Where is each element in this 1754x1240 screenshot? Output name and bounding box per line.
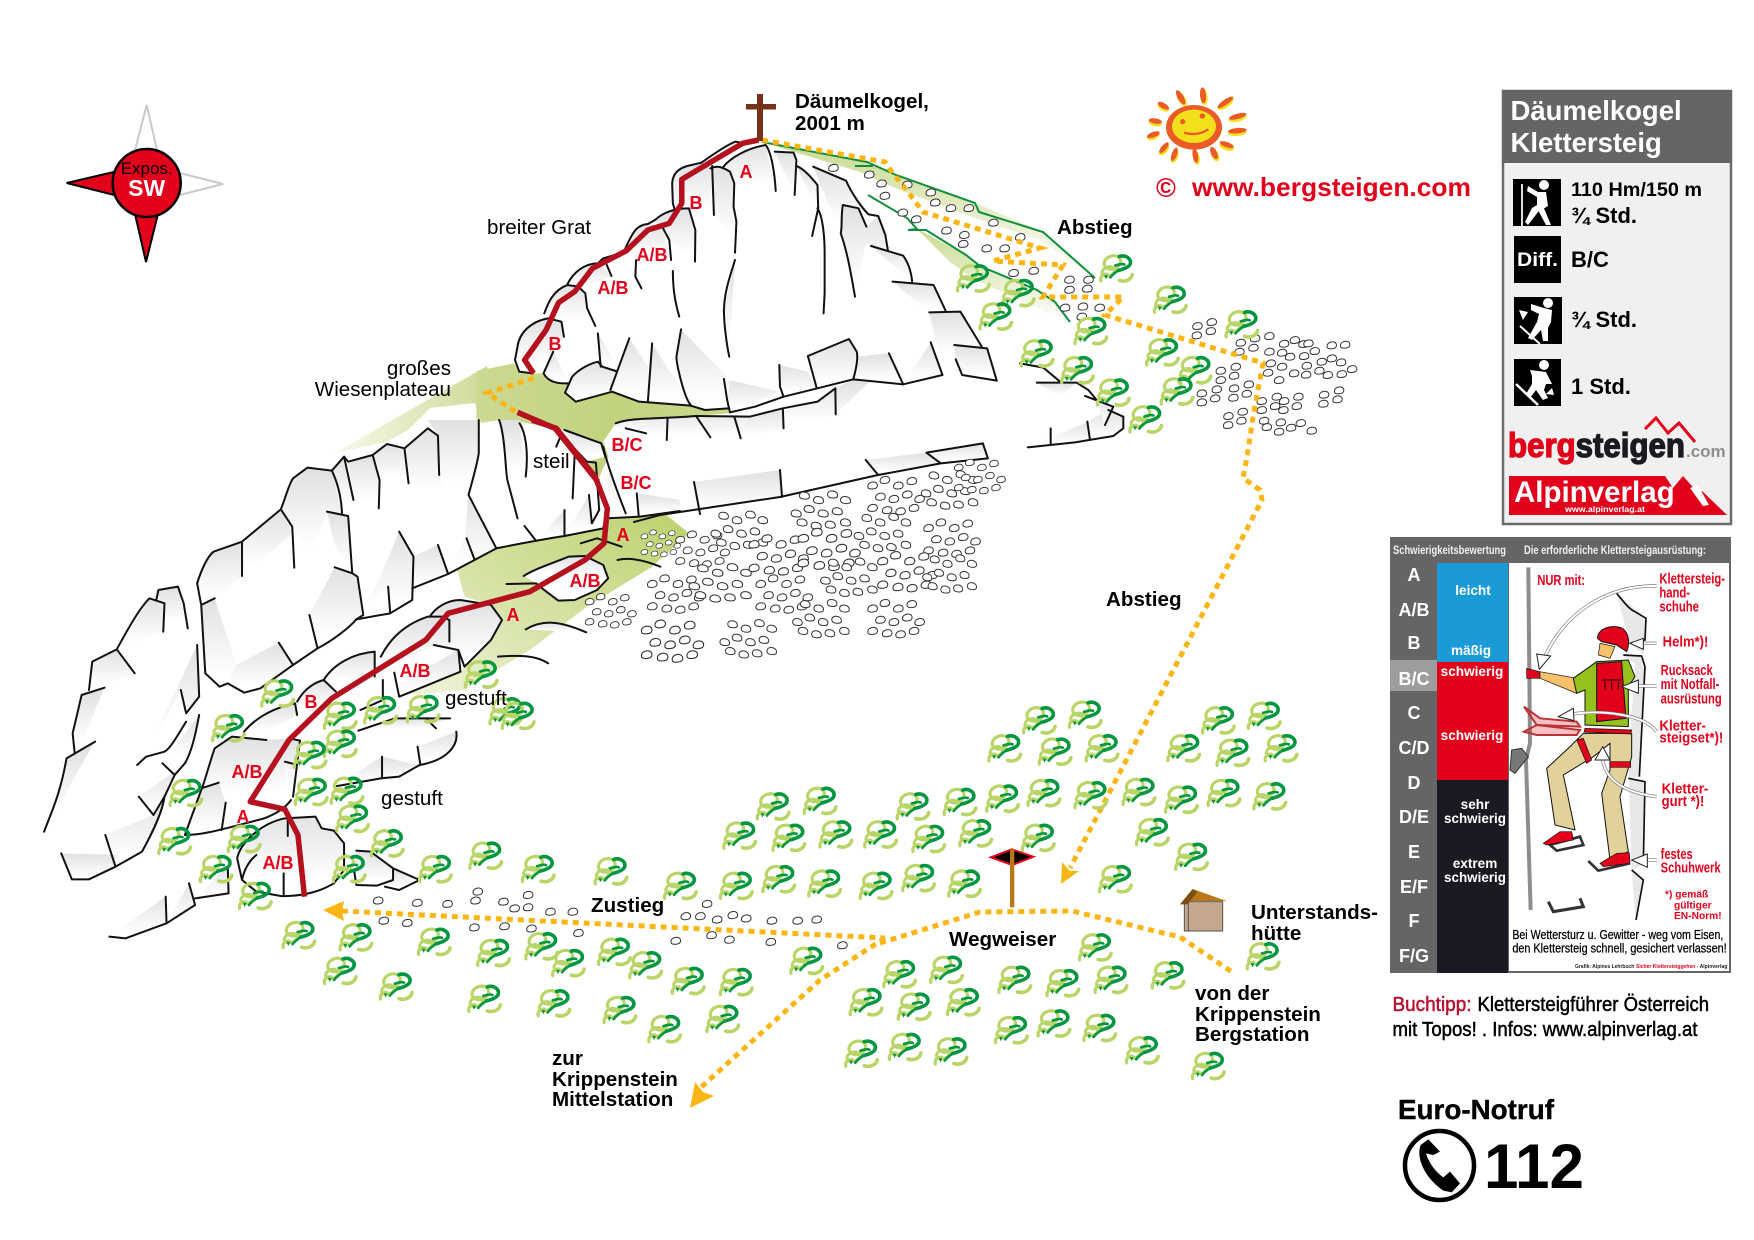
difficulty color column: leicht — [1455, 583, 1491, 598]
panel heading texts — [1393, 545, 1706, 557]
book tip: Klettersteigführer Österreich — [1478, 994, 1709, 1016]
climber illustration: Rucksack — [1661, 663, 1713, 679]
logo: bergsteigen.com: .com — [1686, 442, 1726, 461]
difficulty color column: schwierig — [1441, 728, 1503, 743]
difficulty color column: mäßig — [1451, 643, 1491, 658]
labels: map black text: Wiesenplateau — [315, 378, 451, 401]
climber illustration: schuhe — [1659, 599, 1699, 615]
labels: route grades: A/B — [400, 661, 430, 681]
grade column: C — [1408, 703, 1420, 723]
labels: map black text: Krippenstein — [1195, 1003, 1321, 1026]
grade column: A — [1408, 565, 1420, 585]
labels: route grades: A/B — [232, 762, 262, 782]
grade column: F/G — [1399, 946, 1429, 966]
labels: route grades: B/C — [612, 435, 642, 455]
labels: route grades: A/B — [262, 853, 294, 873]
climber illustration: hand- — [1659, 585, 1690, 601]
copyright website: www.bergsteigen.com — [1191, 172, 1471, 202]
panel: tour info — [1502, 90, 1732, 524]
summit cross — [746, 94, 776, 141]
orange dotted trails — [342, 140, 1263, 1090]
panel: difficulty scale and equipment — [1390, 537, 1731, 973]
labels: map black text: Abstieg — [1057, 216, 1133, 239]
difficulty color column: extrem — [1453, 856, 1497, 871]
grade column: D — [1408, 773, 1420, 793]
labels: map black text: Unterstands- — [1251, 901, 1378, 924]
labels: map black text: Zustieg — [591, 894, 664, 917]
signpost: Wegweiser — [991, 849, 1033, 907]
compass: exposition SW — [67, 105, 223, 262]
labels: map black text: 2001 m — [795, 112, 865, 135]
text: climb stats — [1571, 179, 1702, 228]
climber illustration: Helm*)! — [1663, 635, 1708, 651]
icon: ascent — [1514, 297, 1562, 344]
labels: map black text: breiter Grat — [487, 216, 591, 239]
weather warning — [1512, 927, 1727, 956]
labels: map black text: von der — [1195, 982, 1269, 1005]
panel heading — [1502, 90, 1732, 163]
middle tier rock wall and lower left rocks — [44, 420, 680, 938]
panel heading texts: Schwierigkeitsbewertung — [1393, 545, 1506, 557]
grade column — [1398, 565, 1430, 966]
grade column: C/D — [1398, 738, 1430, 758]
book tip — [1392, 994, 1709, 1041]
compass: exposition SW: SW — [128, 175, 166, 201]
icon: climbing — [1513, 179, 1561, 226]
panel heading: Klettersteig — [1510, 127, 1662, 158]
grade column: F — [1408, 911, 1420, 931]
euro emergency number: 112 — [1484, 1132, 1584, 1202]
icon: phone — [1405, 1131, 1474, 1200]
climber illustration: gurt *)! — [1662, 794, 1704, 810]
labels: route grades: A — [236, 807, 250, 827]
green ridge band above the descent — [762, 142, 1095, 322]
difficulty color column — [1437, 563, 1508, 973]
text: difficulty: B/C — [1571, 247, 1609, 272]
scree field: upper right — [1192, 319, 1357, 435]
labels: route grades: B — [548, 334, 562, 354]
graphic credit: Sicher Klettersteiggehen — [1636, 964, 1696, 970]
labels: route grades: B — [690, 193, 702, 213]
climber illustration: Kletter- — [1662, 781, 1709, 797]
sun — [1146, 87, 1247, 165]
text: descent time: 1 Std. — [1571, 374, 1631, 399]
right foot rocks — [1020, 363, 1123, 447]
compass: exposition SW: Expos. — [121, 159, 173, 178]
icon: descent — [1514, 359, 1561, 406]
text: climb stats: ¾ Std. — [1571, 203, 1637, 228]
book tip: Buchtipp: — [1392, 994, 1472, 1016]
text: ascent time: ¾ Std. — [1571, 307, 1637, 332]
graphic credit — [1575, 964, 1728, 970]
labels: route grades: A — [740, 162, 752, 182]
climber illustration: Kletter- — [1659, 719, 1706, 735]
labels: route grades: B/C — [620, 473, 652, 493]
trees — [159, 253, 1297, 1079]
icon: difficulty — [1514, 236, 1561, 283]
labels: route grades: A/B — [636, 245, 668, 265]
difficulty color column: schwierig — [1444, 811, 1506, 826]
labels: route grades: A — [616, 525, 630, 545]
text: climb stats: 110 Hm/150 m — [1571, 179, 1702, 201]
grade column: A/B — [1398, 600, 1430, 620]
logo: Alpinverlag: www.alpinverlag.at — [1564, 505, 1645, 514]
logo: Alpinverlag: Alpinverlag — [1514, 476, 1675, 509]
climber illustration: NUR mit: — [1537, 573, 1585, 589]
climber illustration: mit Notfall- — [1661, 677, 1720, 693]
lower rock shelf — [634, 470, 878, 522]
climber illustration: Schuhwerk — [1661, 861, 1721, 877]
labels: route grades: A — [506, 605, 520, 625]
labels: map black text: Wegweiser — [949, 928, 1056, 951]
climber illustration — [1510, 567, 1725, 922]
grade column: B/C — [1398, 669, 1430, 689]
labels: route grades: A/B — [598, 278, 628, 298]
labels: route grades — [232, 162, 752, 873]
labels: map black text: gestuft — [381, 787, 443, 810]
summit rock massif — [515, 142, 997, 475]
logo: bergsteigen.com — [1508, 418, 1726, 465]
grade column: B — [1408, 633, 1420, 653]
euro emergency number — [1398, 1094, 1584, 1202]
labels: map black text: Bergstation — [1195, 1023, 1309, 1046]
book tip: mit Topos! . Infos: www.alpinverlag.at — [1392, 1019, 1698, 1041]
grade column: D/E — [1399, 807, 1429, 827]
labels: map black text — [315, 90, 1378, 1111]
logo: Alpinverlag — [1509, 476, 1727, 515]
panel heading: Däumelkogel — [1510, 95, 1682, 126]
climber illustration: steigset*)! — [1659, 731, 1723, 747]
labels: map black text: Däumelkogel, — [795, 90, 929, 113]
climber illustration: Klettersteig- — [1659, 571, 1725, 587]
red climbing route — [250, 140, 759, 897]
scree field: large — [585, 459, 1005, 662]
copyright website: © — [1156, 173, 1176, 203]
graphic credit: - Alpinverlag — [1697, 964, 1728, 970]
labels: map black text: steil — [533, 450, 570, 473]
shelter hut — [1180, 889, 1227, 931]
labels: map black text: großes — [387, 357, 451, 380]
B/C highlight — [1390, 660, 1437, 691]
labels: route grades: A/B — [570, 571, 600, 591]
graphic credit: Grafik: Alpines Lehrbuch — [1575, 964, 1635, 970]
euro emergency number: Euro-Notruf — [1398, 1094, 1555, 1125]
labels: map black text: Krippenstein — [552, 1068, 678, 1091]
climber illustration: gültiger — [1674, 900, 1712, 911]
difficulty color column: schwierig — [1441, 664, 1503, 679]
grade column: E — [1408, 842, 1420, 862]
panel heading texts: Die erforderliche Klettersteigausrüstung: — [1524, 545, 1706, 557]
labels: route grades: B — [304, 692, 318, 712]
difficulty color column: schwierig — [1444, 870, 1506, 885]
labels: map black text: gestuft — [445, 687, 507, 710]
arrowheads — [323, 862, 1079, 1108]
climber illustration: festes — [1661, 847, 1693, 863]
difficulty color column: sehr — [1461, 797, 1490, 812]
climber illustration: EN-Norm! — [1674, 911, 1722, 922]
grade column: E/F — [1400, 877, 1428, 897]
labels: map black text: Abstieg — [1106, 588, 1182, 611]
climber illustration: ausrüstung — [1661, 691, 1722, 707]
meadows — [335, 363, 750, 697]
icon: difficulty: Diff. — [1517, 250, 1558, 271]
climber illustration: *) gemäß — [1665, 890, 1708, 901]
labels: map black text: zur — [552, 1047, 583, 1070]
scree along trails and below summit — [373, 164, 1104, 949]
labels: map black text: Mittelstation — [552, 1088, 673, 1111]
equipment illustration panel — [1509, 563, 1729, 971]
logo: bergsteigen.com: bergsteigen — [1508, 427, 1685, 465]
labels: map black text: hütte — [1251, 922, 1301, 945]
